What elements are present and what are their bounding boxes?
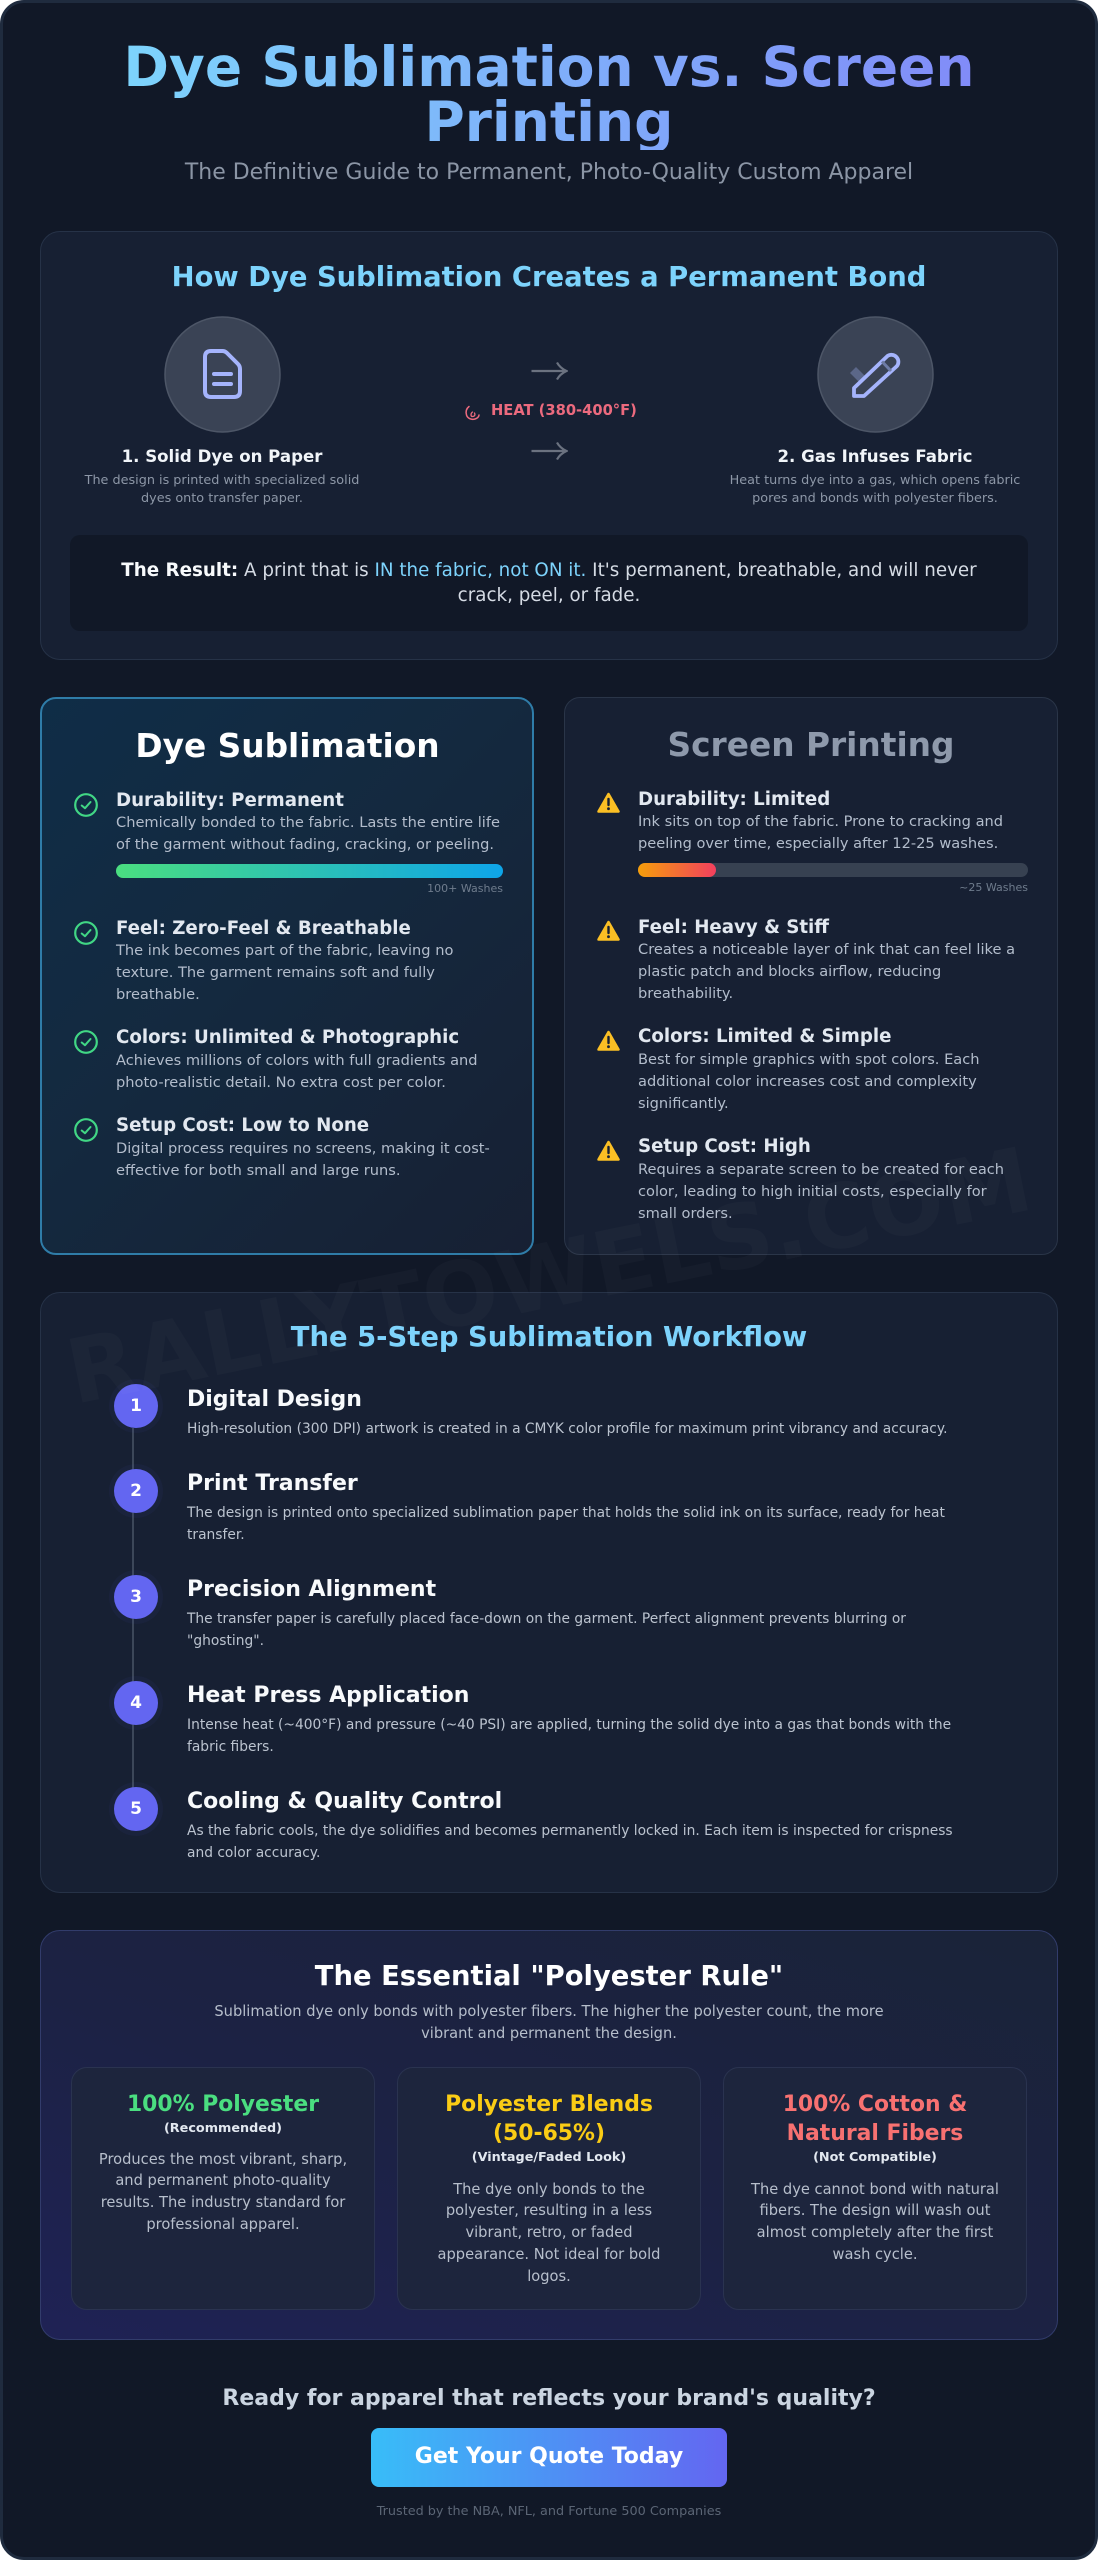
card text: polyester blends xyxy=(438,2180,660,2285)
card: cotton xyxy=(723,2067,1027,2310)
step 4 badge xyxy=(114,1681,158,1725)
card title: cotton xyxy=(783,2092,967,2146)
panel: polyester rule xyxy=(40,1930,1058,2340)
item text: setup xyxy=(116,1140,490,1179)
callout: the result xyxy=(70,535,1028,631)
card title: cotton: 100% Cotton & xyxy=(783,2092,967,2117)
step description: solid dye xyxy=(84,472,359,506)
heading: how it works: How Dye Sublimation Creates a Permanent Bond xyxy=(172,262,926,293)
item text: durability permanent: of the garment without fading, cracking, or peeling. xyxy=(116,836,494,853)
step 4 text xyxy=(187,1717,951,1755)
item text: feel: The ink becomes part of the fabric, leaving no xyxy=(116,942,453,959)
item text: feel heavy xyxy=(638,941,1015,1002)
item text: feel xyxy=(116,942,453,1003)
step 3 text: "ghosting". xyxy=(187,1633,264,1649)
step 4 title: Heat Press Application xyxy=(187,1683,469,1708)
item text: colors: Achieves millions of colors with full gradients and xyxy=(116,1052,478,1069)
heading: workflow: The 5-Step Sublimation Workflow xyxy=(291,1322,807,1352)
panel: dye sublimation card xyxy=(40,697,534,1255)
step 3 badge: 3 xyxy=(130,1587,142,1607)
step description: solid dye: The design is printed with specialized solid xyxy=(85,472,359,488)
item text: feel heavy: breathability. xyxy=(638,985,733,1002)
step 2 title: Print Transfer xyxy=(187,1470,358,1496)
card tag: vintage: (Vintage/Faded Look) xyxy=(472,2150,626,2165)
item text: durability permanent: Chemically bonded to the fabric. Lasts the entire life xyxy=(116,814,500,831)
step description: gas infuses: pores and bonds with polyester fibers. xyxy=(752,490,998,506)
arrow: bottom xyxy=(532,442,568,460)
item text: durability limited: Ink sits on top of the fabric. Prone to cracking and xyxy=(638,813,1003,830)
icon: warning 1 xyxy=(597,792,620,813)
icon: check 2 xyxy=(74,921,98,945)
step description: gas infuses xyxy=(730,472,1020,506)
step 4 badge: 4 xyxy=(130,1693,142,1713)
card title: polyester blends: Polyester Blends xyxy=(445,2092,653,2117)
panel: how dye sublimation works xyxy=(40,231,1058,660)
step 5 text: and color accuracy. xyxy=(187,1845,320,1861)
item title: colors limited: Colors: Limited & Simple xyxy=(638,1026,891,1047)
polyester intro xyxy=(214,2002,884,2042)
heading: dye sublimation: Dye Sublimation xyxy=(135,727,440,765)
step label: gas infuses: 2. Gas Infuses Fabric xyxy=(777,446,973,466)
item text: durability limited: peeling over time, especially after 12-25 washes. xyxy=(638,835,998,852)
result text xyxy=(121,560,977,606)
item title: feel: Feel: Zero-Feel & Breathable xyxy=(116,918,411,939)
item title: setup: Setup Cost: Low to None xyxy=(116,1115,369,1136)
item text: feel: breathable. xyxy=(116,986,200,1003)
card text: polyester blends: appearance. Not ideal for bold xyxy=(438,2246,660,2263)
step label: solid dye: 1. Solid Dye on Paper xyxy=(122,446,322,466)
icon: warning 4 xyxy=(597,1140,620,1161)
button: get your quote: Get Your Quote Today xyxy=(415,2444,683,2469)
item text: setup: Digital process requires no screens, making it cost- xyxy=(116,1140,490,1157)
icon: flame xyxy=(465,406,480,420)
card tag: recommended: (Recommended) xyxy=(164,2121,282,2136)
card text: 100% polyester xyxy=(99,2150,347,2233)
card title: polyester blends: (50-65%) xyxy=(493,2121,605,2146)
button: get your quote xyxy=(371,2428,727,2487)
call to action heading: Ready for apparel that reflects your brand's quality? xyxy=(222,2386,876,2410)
card: 100% polyester xyxy=(71,2067,375,2310)
card text: 100% polyester: results. The industry standard for xyxy=(101,2194,345,2211)
card: polyester blends xyxy=(397,2067,701,2310)
title: Dye Sublimation vs. Screen xyxy=(123,35,975,99)
step 1 title: Digital Design xyxy=(187,1386,362,1412)
polyester intro: vibrant and permanent the design. xyxy=(421,2024,677,2042)
step 1 badge: 1 xyxy=(130,1396,142,1416)
item text: feel heavy: Creates a noticeable layer of ink that can feel like a xyxy=(638,941,1015,958)
card text: cotton: wash cycle. xyxy=(832,2246,918,2263)
step description: gas infuses: Heat turns dye into a gas, which opens fabric xyxy=(730,472,1020,488)
step 3 text: The transfer paper is carefully placed face-down on the garment. Perfect alignment prevents blurring or xyxy=(187,1611,906,1627)
icon: check 3 xyxy=(74,1030,98,1054)
panel: workflow xyxy=(40,1292,1058,1893)
card text: 100% polyester: and permanent photo-quality xyxy=(115,2172,331,2189)
icon: check 1 xyxy=(74,793,98,817)
card text: polyester blends: vibrant, retro, or faded xyxy=(465,2224,633,2241)
card tag: not compatible: (Not Compatible) xyxy=(813,2150,937,2165)
step 2 badge: 2 xyxy=(130,1481,142,1501)
bar label: 100+ washes: 100+ Washes xyxy=(427,882,503,895)
step 2 text: transfer. xyxy=(187,1527,245,1543)
card text: 100% polyester: professional apparel. xyxy=(146,2216,300,2233)
step 5 badge xyxy=(114,1787,158,1831)
item title: durability permanent: Durability: Permanent xyxy=(116,790,344,810)
title xyxy=(0,40,1098,150)
item text: colors xyxy=(116,1052,478,1091)
result text: The Result: A print that is IN the fabric, not ON it. It's permanent, breathable, and will never xyxy=(121,560,977,580)
step 2 badge xyxy=(114,1469,158,1513)
item text: setup high: Requires a separate screen to be created for each xyxy=(638,1161,1004,1178)
trust line: Trusted by the NBA, NFL, and Fortune 500 Companies xyxy=(377,2504,721,2518)
polyester intro: Sublimation dye only bonds with polyester fibers. The higher the polyester count, the more xyxy=(214,2002,884,2020)
card text: cotton: The dye cannot bond with natural xyxy=(751,2180,999,2198)
card title: polyester blends xyxy=(445,2092,653,2146)
icon: warning 3 xyxy=(597,1030,620,1051)
step 4 text: Intense heat (~400°F) and pressure (~40 PSI) are applied, turning the solid dye into a gas that bonds with the xyxy=(187,1717,951,1733)
item text: feel heavy: plastic patch and blocks airflow, reducing xyxy=(638,963,941,980)
heat label: HEAT (380-400°F) xyxy=(491,402,637,418)
step description: solid dye: dyes onto transfer paper. xyxy=(141,490,303,506)
step 3 title: Precision Alignment xyxy=(187,1577,436,1602)
item text: durability permanent xyxy=(116,814,500,853)
card text: 100% polyester: Produces the most vibrant, sharp, xyxy=(99,2150,347,2168)
icon: warning 2 xyxy=(597,920,620,941)
step 5 text: As the fabric cools, the dye solidifies and becomes permanently locked in. Each item is inspected for crispness xyxy=(187,1823,953,1839)
item title: feel heavy: Feel: Heavy & Stiff xyxy=(638,917,829,938)
step 2 text xyxy=(186,1505,945,1543)
card text: cotton: fibers. The design will wash out xyxy=(760,2202,990,2219)
item text: colors limited: significantly. xyxy=(638,1095,729,1112)
icon: pen, gas infuses xyxy=(817,316,934,433)
item text: setup: effective for both small and large runs. xyxy=(116,1162,401,1179)
step 1 badge xyxy=(114,1384,158,1428)
step 2 text: The design is printed onto specialized sublimation paper that holds the solid ink on its surface, ready for heat xyxy=(187,1505,945,1521)
item title: setup high: Setup Cost: High xyxy=(638,1136,811,1157)
step 1 text: High-resolution (300 DPI) artwork is created in a CMYK color profile for maximum print vibrancy and accuracy. xyxy=(187,1421,947,1437)
title: Printing xyxy=(424,90,674,154)
step 5 title: Cooling & Quality Control xyxy=(187,1788,502,1814)
item text: colors limited: Best for simple graphics with spot colors. Each xyxy=(638,1051,980,1068)
step 3 badge xyxy=(114,1575,158,1619)
step 5 badge: 5 xyxy=(130,1799,142,1819)
card title: cotton: Natural Fibers xyxy=(787,2121,963,2146)
card text: polyester blends: polyester, resulting in a less xyxy=(446,2202,652,2219)
icon: document on paper xyxy=(164,316,281,433)
step 5 text xyxy=(187,1823,953,1861)
step 4 text: fabric fibers. xyxy=(187,1739,274,1755)
item text: setup high: color, leading to high initial costs, especially for xyxy=(638,1183,987,1200)
card text: polyester blends: The dye only bonds to the xyxy=(453,2180,645,2198)
item text: setup high xyxy=(638,1161,1004,1222)
item text: setup high: small orders. xyxy=(638,1205,733,1222)
card text: cotton: almost completely after the first xyxy=(757,2224,993,2241)
item title: durability limited: Durability: Limited xyxy=(638,788,830,810)
panel: screen printing card xyxy=(564,697,1058,1255)
item text: colors: photo-realistic detail. No extra cost per color. xyxy=(116,1074,446,1091)
card text: cotton xyxy=(750,2180,999,2263)
item text: colors limited xyxy=(638,1051,980,1112)
step 3 text xyxy=(186,1611,906,1649)
item title: colors: Colors: Unlimited & Photographic xyxy=(116,1027,459,1048)
watermark: RALLYTOWELS.COM xyxy=(58,1127,1040,1425)
subtitle: The Definitive Guide to Permanent, Photo-Quality Custom Apparel xyxy=(185,160,913,184)
heading: screen printing: Screen Printing xyxy=(667,726,955,764)
bar: 100+ washes xyxy=(116,864,503,878)
icon: check 4 xyxy=(74,1118,98,1142)
result text: crack, peel, or fade. xyxy=(458,585,640,606)
card title: 100% polyester: 100% Polyester xyxy=(127,2092,319,2117)
bar label: 25 washes: ~25 Washes xyxy=(959,881,1028,894)
timeline line xyxy=(132,1428,134,1788)
item text: colors limited: additional color increases cost and complexity xyxy=(638,1073,977,1090)
item text: durability limited xyxy=(638,813,1003,852)
bar: 25 washes xyxy=(638,863,1028,877)
arrow: top xyxy=(532,362,568,380)
card text: polyester blends: logos. xyxy=(527,2268,571,2285)
heading: polyester rule: The Essential "Polyester Rule" xyxy=(315,1961,783,1992)
item text: feel: texture. The garment remains soft and fully xyxy=(116,964,435,981)
